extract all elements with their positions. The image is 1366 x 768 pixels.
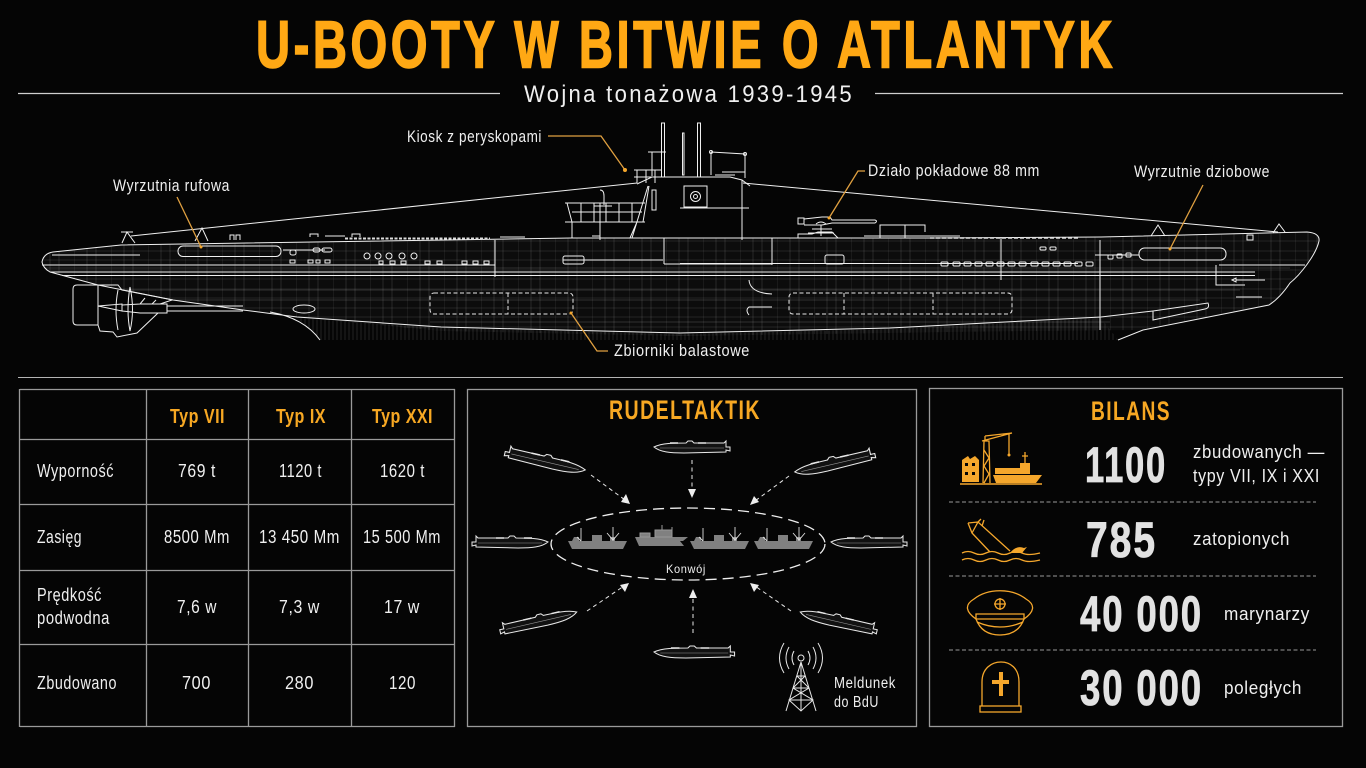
- convoy ships: [568, 525, 813, 549]
- row: Wyporność: 1120 t: [279, 461, 322, 481]
- row: Prędkość podwodna: 7,6 w: [177, 597, 217, 617]
- hull interior grid: [40, 230, 1325, 340]
- row: Zasięg: 13 450 Mm: [259, 527, 340, 547]
- label: Konwój: Konwój: [666, 562, 706, 576]
- ballast tanks: [430, 293, 1012, 314]
- row: Zbudowano: 280: [285, 673, 314, 693]
- label: zatopionych: zatopionych: [1193, 528, 1290, 549]
- bow tube details: [747, 278, 1265, 320]
- row: Prędkość podwodna: Prędkość: [37, 585, 102, 605]
- deck fittings: [121, 224, 1285, 243]
- number: 40 000: 40 000: [1080, 586, 1203, 642]
- callout: Wyrzutnia rufowa: Wyrzutnia rufowa: [113, 177, 230, 195]
- callout: Działo pokładowe: [828, 162, 1040, 220]
- row dividers: [949, 502, 1316, 650]
- hull long lines: [42, 238, 1305, 330]
- section divider: [18, 376, 1343, 378]
- table header: Typ XXI: [372, 406, 433, 428]
- row: Zbudowano: 700: [182, 673, 211, 693]
- row: Zasięg: 8500 Mm: [164, 527, 230, 547]
- row: Zbudowano: 120: [389, 673, 416, 693]
- label: Meldunek do BdU: [834, 675, 896, 711]
- icon: officer cap: [967, 591, 1033, 635]
- heading: Rudeltaktik: RUDELTAKTIK: [609, 395, 761, 425]
- callout: Zbiorniki balastowe: Zbiorniki balastowe: [614, 342, 750, 360]
- table header: [170, 406, 433, 428]
- label: Meldunek do BdU: Meldunek: [834, 675, 896, 692]
- deck gun: [798, 217, 876, 238]
- row: Zasięg: 15 500 Mm: [363, 527, 441, 547]
- stern torpedo tube: [178, 246, 281, 256]
- panel: Bilans: [930, 388, 1342, 726]
- submarine blueprint: [40, 123, 1325, 340]
- icon: radio tower: [780, 643, 822, 711]
- net cutter wire: [131, 183, 1278, 236]
- row: Prędkość podwodna: 17 w: [384, 597, 420, 617]
- callout: Wyrzutnie dziobowe: [1134, 163, 1270, 250]
- row: Wyporność: [37, 461, 425, 481]
- number: 785: 785: [1086, 512, 1157, 568]
- table header: Typ IX: [276, 406, 326, 428]
- heading: Bilans: BILANS: [1091, 396, 1171, 426]
- attacking submarines: [472, 441, 907, 658]
- number: 30 000: 30 000: [1080, 660, 1203, 716]
- attack arrows: [587, 460, 791, 633]
- subtitle with rules: Wojna tonażowa 1939-1945: [524, 81, 854, 108]
- icon: shipyard: [960, 433, 1042, 484]
- icon: sinking ship: [962, 519, 1040, 562]
- callout: Kiosk z peryskopami: [407, 128, 627, 172]
- number: 1100: 1100: [1085, 437, 1167, 493]
- label: polegli: poległych: [1224, 677, 1302, 698]
- icon: grave: [980, 662, 1021, 712]
- label: zbudowanych: [1193, 441, 1325, 486]
- row: Zasięg: [37, 527, 441, 547]
- propeller and rudder: [73, 285, 243, 337]
- table header: Typ VII: [170, 406, 225, 428]
- panel: Rudeltaktik: [468, 390, 916, 726]
- portholes: [290, 247, 1131, 266]
- callout: Działo pokładowe: Działo pokładowe 88 mm: [868, 162, 1040, 180]
- callout: Wyrzutnie dziobowe: Wyrzutnie dziobowe: [1134, 163, 1270, 181]
- panel: comparison table: [20, 389, 455, 727]
- keel ribs: [297, 318, 1118, 340]
- row: Wyporność: 769 t: [178, 461, 216, 481]
- periscopes and masts: [634, 123, 745, 183]
- label: marynarzy: marynarzy: [1224, 603, 1310, 624]
- row: Prędkość podwodna: 7,3 w: [279, 597, 320, 617]
- callout: Zbiorniki balastowe: [570, 312, 750, 360]
- hull outline: [42, 232, 1319, 340]
- row: Wyporność: Wyporność: [37, 461, 114, 481]
- row: Zbudowano: [37, 673, 416, 693]
- callout: Wyrzutnia rufowa: [113, 177, 230, 248]
- bow torpedo tube: [1139, 248, 1226, 260]
- row: Prędkość podwodna: [37, 585, 420, 628]
- row: Prędkość podwodna: podwodna: [37, 608, 110, 628]
- label: zbudowanych: typy VII, IX i XXI: [1193, 465, 1320, 486]
- row: Wyporność: 1620 t: [380, 461, 425, 481]
- callout: Kiosk z peryskopami: Kiosk z peryskopami: [407, 128, 542, 146]
- label: zbudowanych: zbudowanych —: [1193, 441, 1325, 462]
- conning tower: [565, 123, 750, 241]
- row: Zasięg: Zasięg: [37, 527, 82, 547]
- convoy ellipse: [551, 508, 825, 580]
- label: Meldunek do BdU: do BdU: [834, 694, 879, 711]
- row: Zbudowano: Zbudowano: [37, 673, 117, 693]
